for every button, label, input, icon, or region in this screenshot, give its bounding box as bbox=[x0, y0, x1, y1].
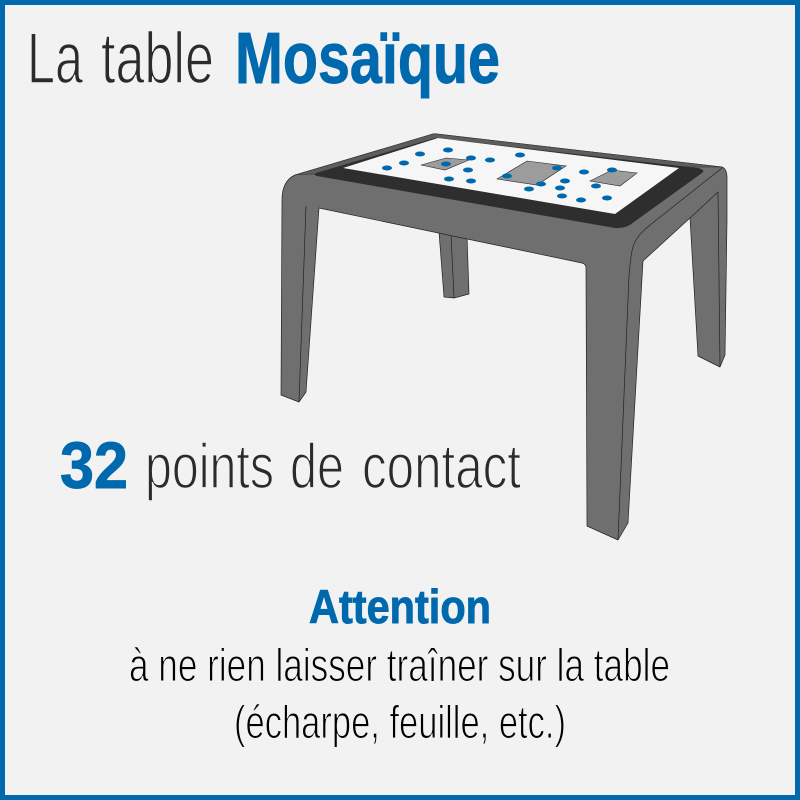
contact points count: de bbox=[290, 432, 344, 502]
contact points bbox=[382, 148, 617, 202]
warning text bbox=[129, 639, 670, 748]
contact points count bbox=[60, 428, 521, 502]
title: Mosaïque bbox=[235, 19, 500, 99]
attention heading: Attention bbox=[309, 580, 491, 633]
contact points count: points bbox=[145, 432, 274, 502]
contact points count: contact bbox=[362, 432, 521, 502]
title bbox=[27, 19, 500, 99]
table body and legs bbox=[281, 134, 727, 540]
back leg bbox=[439, 232, 469, 298]
title: La bbox=[27, 19, 84, 99]
warning text: (écharpe, feuille, etc.) bbox=[234, 696, 566, 748]
illustration: touch table bbox=[281, 134, 727, 540]
contact points count: 32 bbox=[60, 428, 128, 502]
display zones bbox=[421, 158, 637, 186]
title: table bbox=[101, 19, 214, 99]
screen bezel bbox=[315, 138, 703, 228]
tabletop rim bbox=[297, 134, 722, 174]
screen bbox=[343, 138, 679, 214]
